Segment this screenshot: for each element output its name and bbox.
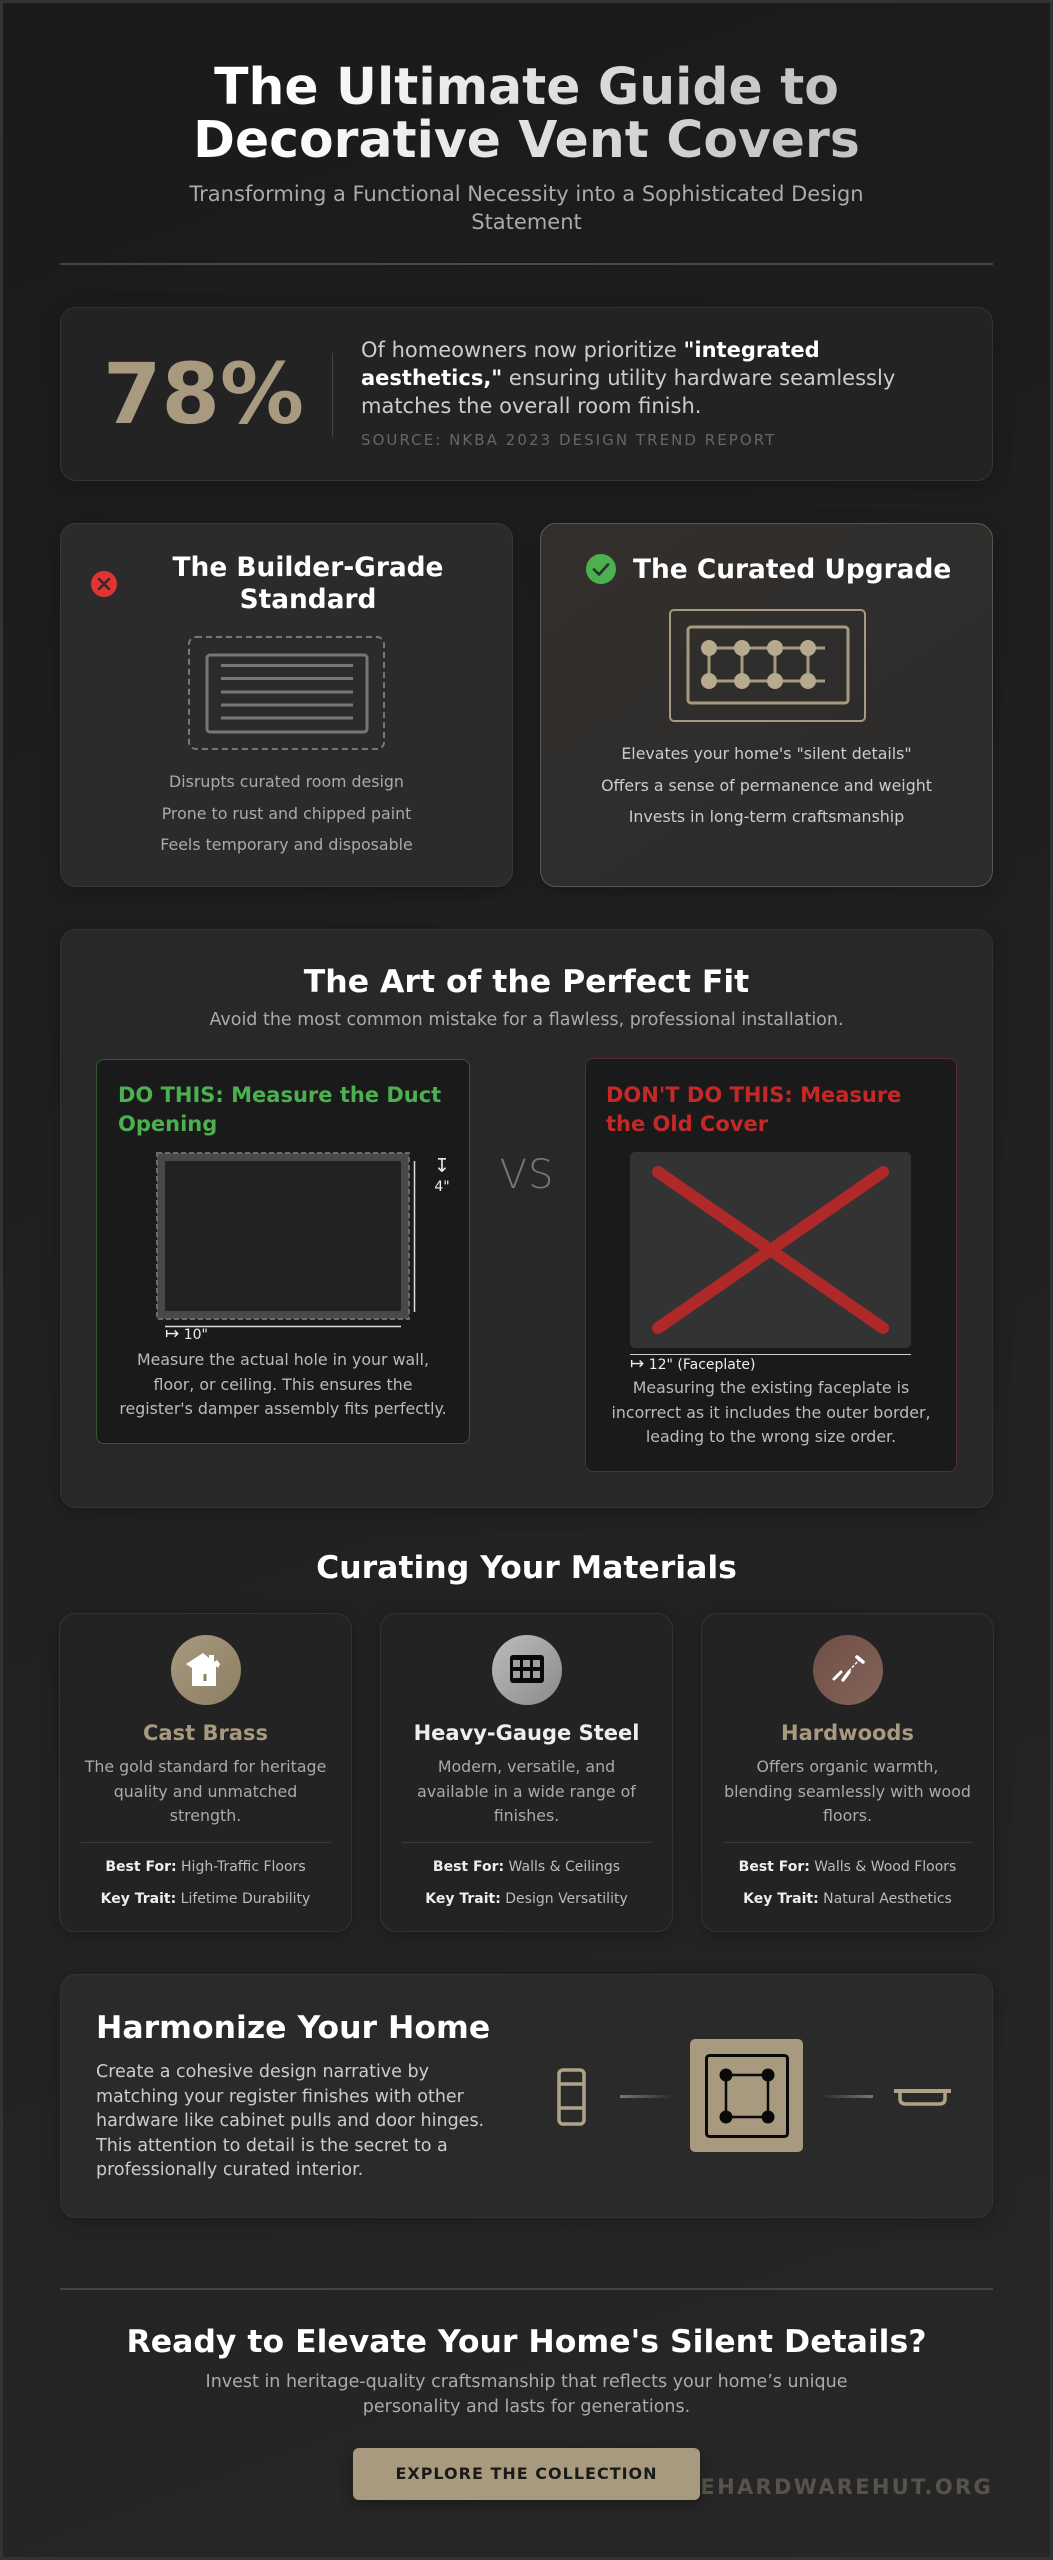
text: personality and lasts for generations.: [363, 2397, 690, 2417]
list: Prone to rust and chipped paint: [162, 804, 411, 822]
icon: door hinge: [557, 2068, 586, 2126]
icon: wood tools: [813, 1635, 883, 1705]
heading: [606, 1083, 901, 1136]
specs: Key Trait: Design Versatility: [425, 1891, 628, 1907]
name: Hardwoods: [781, 1721, 914, 1745]
statistic text: aesthetics," ensuring utility hardware seamlessly: [361, 366, 895, 390]
text: This attention to detail is the secret to a: [96, 2136, 448, 2156]
connector: [620, 2095, 673, 2098]
statistic text: matches the overall room finish.: [361, 394, 701, 418]
description: blending seamlessly with wood: [724, 1782, 971, 1800]
description: strength.: [170, 1806, 241, 1825]
text: [206, 2372, 847, 2417]
button: [353, 2448, 700, 2500]
description: The gold standard for heritage: [85, 1757, 326, 1776]
panel: builder-grade standard: [60, 523, 513, 887]
icon: decorative vent: [669, 609, 866, 722]
panel: do this: [96, 1059, 470, 1444]
name: Cast Brass: [143, 1721, 268, 1745]
diagram: old cover crossed out: [630, 1152, 911, 1355]
icon: cabinet pull: [894, 2089, 951, 2106]
specs: Best For: High-Traffic Floors: [105, 1859, 306, 1875]
heading: [172, 552, 443, 615]
button: EXPLORE THE COLLECTION: [395, 2464, 658, 2483]
big number: 78%: [103, 345, 304, 443]
text: matching your register finishes with other: [96, 2087, 464, 2107]
subtitle: Transforming a Functional Necessity into a Sophisticated Design: [189, 182, 864, 206]
heading: [118, 1083, 441, 1136]
description: quality and unmatched: [114, 1782, 297, 1800]
description: register's damper assembly fits perfectly.: [119, 1399, 447, 1418]
dimension: faceplate: ↦ 12" (Faceplate): [630, 1354, 755, 1374]
dimension: height: 4": [434, 1179, 450, 1195]
panel: the art of the perfect fit: [60, 929, 993, 1508]
dimension: width: ↦ 10": [165, 1324, 208, 1344]
panel: harmonize your home: [60, 1974, 993, 2218]
header: [189, 56, 864, 234]
icon: standard vent: [188, 636, 385, 750]
description: Measuring the existing faceplate is: [633, 1378, 909, 1397]
specs: [425, 1859, 628, 1907]
panel: hardwoods: [701, 1613, 994, 1932]
heading: The Builder-Grade: [173, 552, 443, 583]
list: Invests in long-term craftsmanship: [629, 807, 904, 826]
list: Elevates your home's "silent details": [621, 744, 912, 763]
subheading: Avoid the most common mistake for a flawless, professional installation.: [209, 1010, 844, 1030]
dimension: height: ↧: [434, 1155, 450, 1177]
dimension: height: [434, 1155, 450, 1195]
title: The Ultimate Guide to: [214, 56, 839, 116]
list: [160, 772, 413, 854]
heading: the Old Cover: [606, 1112, 768, 1136]
description: [417, 1757, 636, 1825]
description: floors.: [823, 1806, 872, 1825]
heading: Opening: [118, 1112, 217, 1136]
specs: [101, 1859, 310, 1907]
description: [84, 1757, 326, 1825]
description: Measure the actual hole in your wall,: [137, 1350, 429, 1369]
description: [119, 1350, 447, 1418]
panel: don't do this: [585, 1058, 957, 1472]
watermark: THEHARDWAREHUT.ORG: [664, 2475, 993, 2499]
statistic text: [361, 338, 895, 418]
heading: Harmonize Your Home: [96, 2010, 490, 2046]
statistic text: Of homeowners now prioritize "integrated: [361, 338, 820, 362]
call to action: [126, 2324, 993, 2501]
heading: Ready to Elevate Your Home's Silent Details?: [126, 2324, 927, 2360]
panel: curated upgrade: [540, 523, 993, 887]
subtitle: Statement: [471, 210, 582, 234]
description: available in a wide range of: [417, 1782, 636, 1800]
name: Heavy-Gauge Steel: [414, 1721, 639, 1745]
description: Offers organic warmth,: [757, 1757, 938, 1776]
text: Create a cohesive design narrative by: [96, 2062, 429, 2082]
icon: house: [171, 1635, 241, 1705]
description: [724, 1757, 971, 1825]
description: Modern, versatile, and: [438, 1757, 615, 1776]
heading: The Art of the Perfect Fit: [304, 964, 749, 1000]
description: floor, or ceiling. This ensures the: [154, 1374, 412, 1394]
panel: cast brass: [59, 1613, 352, 1932]
list: [601, 744, 932, 826]
icon: red x: [91, 571, 117, 597]
vs label: VS: [500, 1152, 554, 1198]
panel: statistic: [60, 307, 993, 481]
heading: DON'T DO THIS: Measure: [606, 1083, 901, 1107]
list: Feels temporary and disposable: [160, 835, 413, 854]
heading: Standard: [240, 584, 376, 615]
connector: [820, 2095, 873, 2098]
description: leading to the wrong size order.: [646, 1427, 896, 1446]
text: [96, 2062, 484, 2180]
description: [612, 1378, 930, 1446]
subtitle: [189, 182, 864, 234]
description: finishes.: [494, 1806, 559, 1825]
panel: heavy-gauge steel: [380, 1613, 673, 1932]
heading: DO THIS: Measure the Duct: [118, 1083, 441, 1107]
title: [0, 60, 1053, 166]
text: Invest in heritage-quality craftsmanship that reflects your home’s unique: [206, 2372, 847, 2392]
description: incorrect as it includes the outer border,: [612, 1402, 930, 1422]
list: Disrupts curated room design: [169, 772, 404, 791]
specs: Best For: Walls & Wood Floors: [739, 1859, 956, 1875]
source: SOURCE: NKBA 2023 DESIGN TREND REPORT: [361, 431, 776, 449]
specs: Best For: Walls & Ceilings: [433, 1859, 620, 1875]
heading: curating your materials: Curating Your Materials: [316, 1550, 737, 1586]
diagram: duct opening: [156, 1152, 416, 1328]
specs: Key Trait: Lifetime Durability: [101, 1891, 310, 1907]
title: Decorative Vent Covers: [193, 110, 860, 168]
icon: green check: [586, 554, 616, 584]
list: Offers a sense of permanence and weight: [601, 776, 932, 794]
heading: The Curated Upgrade: [633, 554, 951, 585]
specs: Key Trait: Natural Aesthetics: [743, 1891, 952, 1907]
specs: [739, 1859, 956, 1907]
icon: grid: [492, 1635, 562, 1705]
icon: register: [690, 2039, 803, 2152]
text: professionally curated interior.: [96, 2160, 363, 2180]
text: hardware like cabinet pulls and door hinges.: [96, 2111, 484, 2131]
